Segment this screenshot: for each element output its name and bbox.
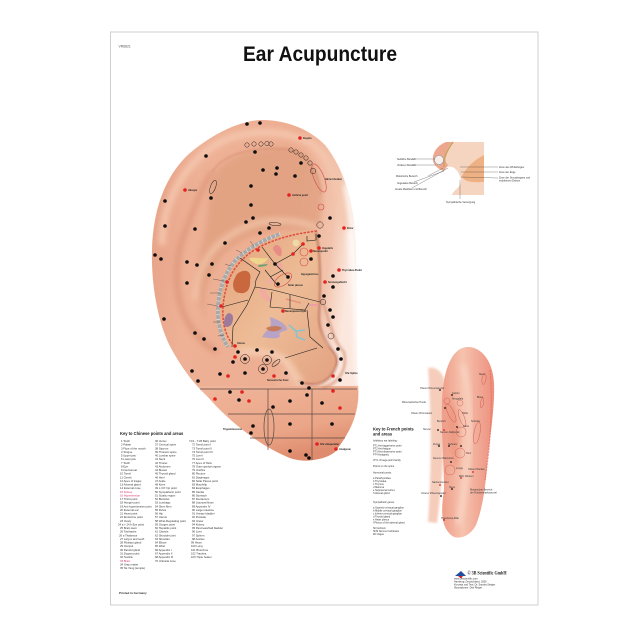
French key body: d Thyroid gland bbox=[373, 516, 391, 518]
key column 1: 3 Floor of the mouth bbox=[121, 446, 146, 450]
concha dark rim bbox=[298, 232, 337, 384]
back ear labels: Amygdala bbox=[452, 398, 464, 400]
key column 1: 6 Lower jaw bbox=[121, 457, 136, 461]
key column 3: 90 Large intestine bbox=[192, 508, 214, 512]
key column 1: 14 External nose bbox=[120, 486, 141, 490]
ear point labels: Dogma bbox=[303, 137, 312, 140]
organ: pink strip bbox=[309, 304, 318, 306]
key column 1: 19 Anti hypertensive point bbox=[120, 504, 152, 508]
section white notch bbox=[452, 180, 461, 195]
triangular fossa shade bbox=[197, 148, 322, 320]
key column 2: 39 Thoracic spine bbox=[155, 450, 177, 454]
key column 3: 72 Tonsil point I bbox=[192, 443, 211, 447]
French key body: ZN Vagus bbox=[373, 533, 385, 536]
publisher name: © 3B Scientific GmbH bbox=[468, 570, 507, 576]
imprint lines: Konzept und Text: Dr. Sandra Steiger bbox=[454, 584, 495, 586]
section labels: endokrinen Drüsen bbox=[499, 180, 521, 182]
key column 3: 97 Spleen bbox=[192, 533, 205, 537]
section labels: Vorderer Bereich bbox=[397, 164, 416, 167]
back ear labels: Motorischer Bereich bbox=[470, 488, 493, 492]
organ: heart bbox=[233, 271, 251, 293]
organ: pink liver bbox=[277, 263, 283, 269]
key column 2: 70 Urticaria zone bbox=[155, 559, 176, 563]
key column 2: 58 Wind-Regulating point bbox=[155, 519, 186, 523]
back ear labels: Oberer Rücken bbox=[468, 468, 486, 471]
tragus inner shade bbox=[322, 300, 345, 388]
imprint lines: www.3bscientific.com bbox=[454, 578, 478, 580]
ear point labels: Hämorrhoiden bbox=[325, 178, 343, 181]
back ear labels: Unterer Rheumapunkt bbox=[421, 492, 446, 495]
key column 2: 66 Appendix I bbox=[155, 548, 172, 552]
key column 1: 28 Pituitary gland bbox=[120, 541, 142, 545]
French key body: Sympathetic genes bbox=[373, 501, 395, 504]
back ear labels: Schulter bbox=[471, 420, 480, 423]
back ear labels: Mittl. Rücken bbox=[459, 475, 474, 478]
key column 3: 87 Duodenum bbox=[192, 497, 210, 501]
key to French points and areas bbox=[373, 426, 414, 536]
main ear illustration bbox=[152, 120, 362, 461]
back ear labels: Herz bbox=[466, 452, 472, 455]
French key body: b Middle cervical ganglion bbox=[373, 510, 402, 512]
ear point labels: Trigeminuszone bbox=[223, 428, 243, 431]
French key body: b Thyroidea bbox=[373, 480, 387, 483]
key column 1: 8 Eye bbox=[121, 464, 129, 468]
key column 3 bbox=[189, 439, 223, 559]
key column 1: 15 Kidney bbox=[120, 490, 133, 494]
French key body: Inhibitory ear labeling: bbox=[373, 440, 398, 442]
key column 2: 44 Breast bbox=[155, 468, 167, 472]
section labels: Areale Maxillare und Bereich bbox=[395, 188, 428, 191]
concha boundary lines bbox=[222, 234, 323, 358]
key column 3: 88 Jejunum/Ileum bbox=[192, 501, 214, 505]
back ear ridge bbox=[458, 365, 469, 525]
organ: bowel strip bbox=[286, 299, 301, 303]
key column 2: 40 Lumbar spine bbox=[155, 454, 176, 458]
organ: cream spot bbox=[292, 240, 300, 246]
organ: uterus purple bbox=[224, 313, 233, 327]
key column 3: 85 Cardia bbox=[192, 490, 204, 494]
key column 3: 93 Ureter bbox=[192, 519, 204, 523]
key column 2: 38 Sacrum bbox=[155, 446, 169, 450]
back ear labels: Hypertonie-Rille bbox=[441, 517, 459, 520]
back ear labels: Hüfte bbox=[462, 412, 469, 415]
key column 1: 27 Larynx and teeth bbox=[120, 537, 145, 541]
key column 1: 26 a Thalamus bbox=[119, 533, 138, 537]
back ear silhouette bbox=[442, 347, 494, 538]
key column 1: 23 Ovary bbox=[120, 519, 132, 523]
back ear labels: Niere bbox=[449, 486, 456, 489]
section labels: Zone der Sexualorgane und bbox=[499, 176, 531, 180]
organ: pancreas yellow bbox=[249, 258, 268, 264]
key column 1: 35 Tai Yang (temple) bbox=[120, 566, 145, 570]
key column 3: 89 Appendix IV bbox=[192, 504, 211, 508]
key column 3: 84 Esophagus bbox=[192, 486, 210, 490]
ear point labels: Sensorische Zone bbox=[267, 379, 289, 382]
key column 2: 65 Wrist bbox=[155, 544, 165, 548]
French key body: c Inferior cervical ganglion bbox=[373, 512, 403, 516]
key column 1: 16 Hypertension bbox=[120, 493, 140, 497]
back ear labels: Niere bbox=[479, 373, 486, 376]
section labels: Motorische Bereich bbox=[396, 175, 418, 178]
section labels: Zone der Enge bbox=[499, 171, 516, 174]
key column 2: 55 Pelvis bbox=[155, 508, 167, 512]
key column 1: 10 Tonsil bbox=[120, 472, 131, 476]
back ear red points bbox=[439, 429, 474, 521]
French key body: c Thymus bbox=[373, 483, 385, 486]
ear point labels: Allergie bbox=[188, 189, 198, 192]
key column 1: 26 Toothache bbox=[120, 530, 137, 534]
key column 2: 56 Hip bbox=[155, 512, 163, 516]
section leader lines bbox=[412, 159, 498, 199]
back ear labels: Blase bbox=[477, 396, 484, 399]
publisher logo and imprint bbox=[454, 570, 507, 590]
back ear rim hatch bbox=[485, 370, 491, 480]
back ear labels: Nackenmuskel bbox=[432, 481, 449, 484]
key column 2: 54 Shen Men bbox=[155, 504, 172, 508]
key column 2: 62 Shoulder joint bbox=[155, 533, 176, 537]
key column 3: 101 Bronchus bbox=[191, 548, 209, 552]
back ear dark zones bbox=[447, 395, 459, 470]
ear point labels: Solar plexus bbox=[288, 284, 303, 287]
key column 1: 30 Parotid gland bbox=[120, 548, 140, 552]
key column 1: 25 Brain stem bbox=[120, 526, 138, 530]
back ear labels: Nervus Olfactorius bbox=[433, 457, 454, 460]
key column 3: 79 Urethra bbox=[192, 468, 205, 472]
key column 1: 13 Adrenal gland bbox=[120, 483, 141, 487]
printed in Germany note: Printed in Germany bbox=[119, 591, 147, 595]
key column 1: 20 External ear bbox=[120, 508, 139, 512]
key column 1: 24 a + 24 b Eye point bbox=[118, 522, 144, 526]
key column 1: 31 Dogma point bbox=[120, 552, 140, 556]
French key body: PT3 Anti-depressive point bbox=[373, 450, 402, 454]
organ: stomach bbox=[260, 287, 272, 302]
key column 3: 92 Prostate bbox=[192, 515, 207, 519]
French key heading: Key to French points bbox=[373, 426, 414, 432]
key to Chinese points and areas bbox=[118, 431, 223, 570]
back ear labels: Sehnerv bbox=[448, 443, 458, 446]
imprint lines: Hamburg, Deutschland, 2006 bbox=[454, 580, 487, 584]
key column 3: 83 Mouth/lip bbox=[192, 483, 207, 487]
key column 1: 22 Endocrine point bbox=[120, 515, 143, 519]
key column 3: 77 Apex of Helix bbox=[192, 461, 212, 465]
organ: small green bbox=[258, 264, 268, 267]
open ring points bbox=[208, 141, 334, 374]
French key body: Hormonal points bbox=[373, 472, 392, 474]
ear point labels: Ohr-Akupunktur bbox=[320, 443, 339, 446]
ear point labels: Sonnengeflecht bbox=[328, 281, 347, 284]
back neck flap bbox=[428, 368, 445, 523]
back ear labels: Zunge bbox=[433, 443, 441, 446]
key column 3: 78 Outer genital organs bbox=[192, 464, 221, 468]
key column 1: 29 Occiput bbox=[120, 544, 133, 548]
ear point labels: Vegetativ bbox=[322, 247, 334, 250]
key column 2: 63 Shoulder bbox=[155, 537, 170, 541]
key column 3: 96 Liver bbox=[192, 530, 202, 534]
organ: kidney bbox=[273, 245, 282, 256]
ear point labels: Analgesie bbox=[339, 448, 351, 451]
ear point labels: Nierenpunkt bbox=[313, 250, 328, 253]
French key body: e Suprarenal cortex bbox=[373, 489, 396, 492]
key column 3: 99 Heart bbox=[191, 541, 202, 545]
French key body: VH 1 Omega point family bbox=[373, 459, 402, 462]
article number: VR6821 bbox=[118, 44, 131, 48]
French key body: Points on the spine bbox=[373, 465, 395, 468]
back ear labels: Lunge bbox=[456, 467, 464, 470]
key column 1: 32 Testicle bbox=[120, 555, 133, 559]
key column 2: 43 Abdomen bbox=[155, 464, 171, 468]
black acupuncture points bbox=[153, 121, 343, 460]
key column 3: 71/1 - 71/6 Baby point bbox=[189, 439, 216, 443]
concha bbox=[218, 231, 337, 384]
title: Ear Acupuncture bbox=[243, 43, 397, 66]
key column 2: 52 Buttocks bbox=[155, 497, 170, 501]
key column 2: 41 Neck bbox=[155, 457, 166, 461]
French key body bbox=[373, 440, 405, 536]
key column 1: 7 Tooth bbox=[121, 461, 130, 465]
section pink left fold bbox=[433, 142, 452, 171]
key column 3: 103 Triple heater bbox=[191, 555, 212, 559]
right edge fade bbox=[345, 185, 360, 385]
organ: trachea bbox=[289, 325, 305, 340]
key column 3: 73 Tonsil point II bbox=[192, 446, 212, 450]
French key body: f Plexus of the adrenal gland bbox=[373, 522, 405, 524]
helix root strip ticks bbox=[218, 234, 280, 347]
key column 3: 95 Pancreas/Gall bladder bbox=[192, 526, 223, 530]
poster frame bbox=[110, 32, 538, 605]
key column 2: 49 L.V.P. hip point bbox=[155, 486, 177, 490]
imprint lines bbox=[454, 578, 495, 590]
French key body: a Superior cervical ganglion bbox=[373, 506, 404, 510]
key column 3: 102 Trachea bbox=[191, 552, 207, 556]
back ear labels: Bereich bbox=[437, 420, 446, 423]
back ear labels: Nerven bbox=[423, 428, 432, 431]
key column 3: 75 Liver I bbox=[192, 454, 204, 458]
key column 1: 5 Upper jaw bbox=[121, 454, 136, 458]
back-of-ear illustration bbox=[402, 347, 497, 538]
key column 2: 51 Sciatic region bbox=[155, 493, 176, 497]
French key body: PT2 Anti-fatigue bbox=[373, 448, 391, 450]
ear point labels: Ohr-Spitze bbox=[345, 372, 358, 375]
French key body: f Adrenal gland bbox=[373, 492, 390, 495]
back ear labels: Rheumatischer Punkt bbox=[402, 401, 426, 404]
French key body: SN Ischium bbox=[373, 527, 386, 530]
key column 2: 68 Appendix III bbox=[155, 555, 173, 559]
key column 1: 21 Heart point bbox=[120, 512, 138, 516]
key column 3: 91 Urinary bladder bbox=[192, 512, 215, 516]
key column 3: 94 Kidney bbox=[192, 522, 205, 526]
French key body: e Heart plexus bbox=[373, 518, 390, 522]
key column 1: 11 Cheek bbox=[120, 475, 132, 479]
key column 3: 76 Liver II bbox=[192, 457, 204, 461]
section white bulb bbox=[434, 156, 444, 164]
helix root grey strip bbox=[218, 234, 280, 347]
logo icon bbox=[455, 571, 466, 578]
helix root red band bbox=[223, 231, 317, 346]
section tan fold bbox=[444, 142, 453, 167]
key column 2: 37 Cervical spine bbox=[155, 443, 177, 447]
back ear labels bbox=[402, 373, 497, 520]
back ear labels: Nerven-Nullpunkt bbox=[440, 431, 460, 434]
section pale skin bbox=[437, 142, 484, 195]
small cross-section diagram bbox=[395, 142, 531, 204]
key column 2: 36 Vertex bbox=[155, 439, 167, 443]
back ear labels: Obere Ohrmuskeln bbox=[411, 412, 433, 415]
key column 1: 17 Thirst point bbox=[120, 497, 138, 501]
section labels bbox=[395, 158, 531, 204]
ear point labels bbox=[188, 137, 362, 451]
lobe shading bbox=[198, 386, 358, 460]
key column 2: 60 Hepatitis point bbox=[155, 526, 176, 530]
key column 1: 4 Tongue bbox=[121, 450, 133, 454]
lobe grid lines bbox=[200, 389, 357, 460]
section labels: Seitliche Bereich bbox=[397, 158, 416, 161]
key column 1: 2 Palate bbox=[121, 443, 132, 447]
key column 3: 98 Ascites bbox=[192, 537, 205, 541]
key column 2: 50 Sympathetic point bbox=[155, 490, 181, 494]
section labels: Sympathische Versorgung bbox=[446, 201, 476, 204]
key column 2: 53 Lumbago bbox=[155, 501, 171, 505]
key column 3: 82 Solar Plexus point bbox=[192, 479, 218, 483]
key column 1: 33 Brain bbox=[120, 559, 131, 563]
ear point labels: Asthma point bbox=[292, 194, 308, 197]
helix fold shadow bbox=[177, 172, 217, 352]
key heading: Key to Chinese points and areas bbox=[120, 431, 184, 436]
key column 3: 80 Rectum bbox=[192, 472, 206, 476]
key column 3: 100 Lung bbox=[191, 544, 203, 548]
key column 1: 18 Hunger point bbox=[120, 501, 140, 505]
key column 3: 81 Diaphragm bbox=[192, 475, 210, 479]
key column 1: 1 Tooth bbox=[121, 439, 130, 443]
antihelix light band bbox=[195, 220, 316, 300]
key column 3: 86 Stomach bbox=[192, 493, 207, 497]
key column 2: 61 Clavicle bbox=[155, 530, 169, 534]
helix root outward ticks bbox=[207, 241, 254, 336]
key column 2: 46 Heel bbox=[155, 475, 165, 479]
key column 2: 64 Elbow bbox=[155, 541, 166, 545]
back ear labels: Darm bbox=[463, 425, 469, 428]
key column 1: 34 Gray matter bbox=[120, 562, 138, 566]
key column 2 bbox=[155, 439, 186, 563]
red area outlines bbox=[272, 162, 329, 290]
back ear labels: Gehirn bbox=[452, 392, 460, 395]
ear point labels: Thyroidea-Punkt bbox=[342, 269, 362, 272]
ear point labels: Dolor bbox=[347, 227, 354, 230]
key column 3: 74 Tonsil point III bbox=[192, 450, 213, 454]
French key body: d Mamma bbox=[373, 486, 385, 489]
key column 2: 42 Thorax bbox=[155, 461, 168, 465]
key column 2: 48 Knee bbox=[155, 483, 166, 487]
ear point labels: Uterus bbox=[237, 342, 246, 345]
key column 2: 67 Appendix II bbox=[155, 552, 173, 556]
imprint lines: Illustrationen: Dirk Rieger bbox=[454, 586, 482, 590]
organ: lungs bbox=[262, 317, 287, 338]
key column 1: 12 Apex of tragus bbox=[120, 479, 142, 483]
key column 2: 57 Uterus bbox=[155, 515, 168, 519]
key column 2: 47 Ankle bbox=[155, 479, 166, 483]
organ: heart small bbox=[266, 326, 282, 331]
ear point labels: Hypogastricus bbox=[301, 273, 319, 276]
ear point labels: Nierenparenchym bbox=[285, 310, 307, 313]
back ear outlines bbox=[444, 373, 487, 475]
key column 2: 45 Thyroid gland bbox=[155, 472, 176, 476]
back ear black points bbox=[437, 389, 462, 497]
section labels: Vegetative Bereich bbox=[397, 182, 418, 185]
key column 2: 59 Oxygen point bbox=[155, 522, 175, 526]
French key body: PT1 Anti-aggressive point bbox=[373, 444, 402, 448]
key column 1: 9 Internal ear bbox=[121, 468, 137, 472]
French key body: PT4 Analgesic bbox=[373, 454, 390, 456]
helix rim highlight bbox=[162, 132, 345, 245]
section labels: Zone des Wirbelbogen bbox=[499, 166, 525, 169]
back ear labels: der Rückenmarkswurzel bbox=[470, 492, 497, 494]
French key body: SNS Nervus trochlearis bbox=[373, 530, 400, 533]
red acupuncture points bbox=[183, 136, 346, 451]
key column 1 bbox=[118, 439, 152, 570]
helix inner crease bbox=[212, 149, 321, 195]
antitragus fold bbox=[238, 352, 302, 382]
French key body: a Parathyroidea bbox=[373, 477, 391, 480]
key to French points and areas: and areas bbox=[373, 432, 393, 436]
back ear labels: Oberer Rheumapunkt bbox=[420, 387, 444, 390]
organ: intestine bbox=[266, 278, 274, 284]
ear outer silhouette bbox=[152, 120, 359, 461]
section orange band bbox=[462, 155, 484, 182]
